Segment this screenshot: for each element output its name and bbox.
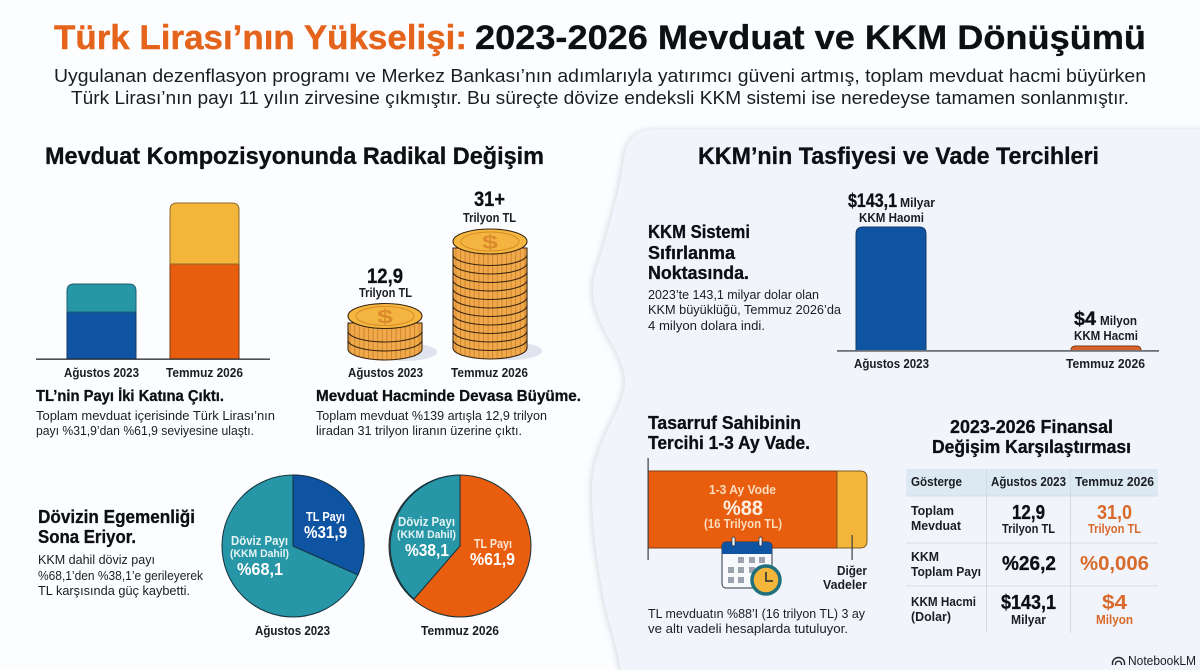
text block: maturity note: TL mevduatın %88’I (16 trilyon TL) 3 ay xyxy=(648,606,865,621)
pie chart: July 2026: TL Payı xyxy=(474,537,512,551)
maturity bar xyxy=(648,458,867,592)
subtitle: Türk Lirası’nın payı 11 yılın zirvesine çıkmıştır. Bu süreçte dövize endeksli KKM sistemi ise neredeyse tamamen sonlanmıştır. xyxy=(71,87,1129,108)
text block: maturity note: ve altı vadeli hesaplarda tutuluyor. xyxy=(648,621,848,636)
stacked bar chart: TL share: Ağustos 2023 xyxy=(64,366,139,380)
text block: KKM system xyxy=(648,222,842,333)
table header xyxy=(911,475,1154,489)
text block: FX dominance: KKM dahil döviz payı xyxy=(38,552,155,567)
row: KKM share: Toplam Payı xyxy=(911,565,981,579)
coin stack: 12,9 trillion: $ xyxy=(377,307,394,328)
icon: calendar with clock xyxy=(722,537,780,594)
pie chart: August 2023: Ağustos 2023 xyxy=(255,624,330,638)
text block: FX dominance: Dövizin Egemenliği xyxy=(38,507,195,527)
heading: maturity preference xyxy=(648,413,810,453)
text block: TL share: TL’nin Payı İki Katına Çıktı. xyxy=(36,387,224,405)
maturity bar: (16 Trilyon TL) xyxy=(704,517,782,531)
text block: KKM system: 4 milyon dolara indi. xyxy=(648,318,765,333)
text block: deposit growth: liradan 31 trilyon liranın üzerine çıktı. xyxy=(316,423,522,438)
text block: deposit growth: Toplam mevduat %139 artışla 12,9 trilyon xyxy=(316,408,547,423)
coin stack: 31+ trillion: Trilyon TL xyxy=(463,211,516,225)
row: total deposits: Mevduat xyxy=(911,519,962,533)
text block: KKM system: Noktasında. xyxy=(648,263,749,283)
heading: maturity preference: Tercihi 1-3 Ay Vade. xyxy=(648,433,810,453)
pie chart: August 2023 xyxy=(222,475,364,638)
pie chart: July 2026: %38,1 xyxy=(405,540,449,560)
maturity bar: Vadeler xyxy=(823,578,867,592)
logo: NotebookLM: NotebookLM xyxy=(1128,653,1196,668)
coin stack: 12,9 trillion: Trilyon TL xyxy=(359,286,412,300)
row: KKM share: %26,2 xyxy=(1002,553,1056,575)
bar chart: KKM volume: Milyar xyxy=(900,196,935,210)
table header: Gösterge xyxy=(911,475,962,489)
subtitle xyxy=(54,65,1146,108)
row: KKM share xyxy=(911,550,1149,579)
text block: KKM system: Sıfırlanma xyxy=(648,243,736,263)
pie chart: July 2026 xyxy=(389,475,531,638)
text block: maturity note xyxy=(648,606,865,636)
pie chart: July 2026: (KKM Dahil) xyxy=(397,529,456,541)
text block: KKM system: 2023’te 143,1 milyar dolar olan xyxy=(648,287,819,302)
bar chart: KKM volume: $4 xyxy=(1074,309,1096,330)
coin stack: 31+ trillion: Temmuz 2026 xyxy=(451,366,528,380)
stacked bar chart: TL share xyxy=(36,203,270,380)
heading: maturity preference: Tasarruf Sahibinin xyxy=(648,413,801,433)
text block: KKM system: KKM Sistemi xyxy=(648,222,750,242)
row: KKM volume: KKM Hacmi xyxy=(911,595,976,609)
coin stack: 31+ trillion xyxy=(451,188,542,380)
pie chart: July 2026: %61,9 xyxy=(470,549,515,569)
comparison table xyxy=(906,469,1158,633)
row: total deposits: Toplam xyxy=(911,504,954,518)
row: total deposits: 31,0 xyxy=(1097,502,1132,524)
pie chart: August 2023: TL Payı xyxy=(306,510,345,524)
text block: TL share: Toplam mevduat içerisinde Türk Lirası’nın xyxy=(36,408,275,423)
row: KKM volume: $4 xyxy=(1102,592,1128,614)
bar chart: KKM volume xyxy=(837,191,1159,371)
title: Türk Lirası’nın Yükselişi: xyxy=(54,19,467,57)
heading: comparison table: 2023-2026 Finansal xyxy=(950,417,1113,437)
coin stack: 12,9 trillion: 12,9 xyxy=(367,265,403,288)
row: total deposits xyxy=(911,502,1141,536)
subtitle: Uygulanan dezenflasyon programı ve Merkez Bankası’nın adımlarıyla yatırımcı güveni artmış, toplam mevduat hacmi büyürken xyxy=(54,65,1146,86)
coin stack: 31+ trillion: 31+ xyxy=(474,188,505,211)
row: KKM volume: $143,1 xyxy=(1001,592,1056,614)
maturity bar: Diğer xyxy=(837,564,867,578)
text block: FX dominance xyxy=(38,507,203,598)
row: KKM volume xyxy=(911,592,1133,627)
table header: Ağustos 2023 xyxy=(991,475,1066,489)
row: KKM share: KKM xyxy=(911,550,939,564)
maturity bar: 1-3 Ay Vode xyxy=(709,483,776,497)
row: total deposits: 12,9 xyxy=(1012,502,1045,524)
text block: FX dominance: TL karşısında güç kaybetti. xyxy=(38,583,190,598)
pie chart: August 2023: %31,9 xyxy=(304,522,347,542)
pie chart: August 2023: (KKM Dahil) xyxy=(230,548,289,560)
row: total deposits: Trilyon TL xyxy=(1002,522,1055,536)
bar chart: KKM volume: Temmuz 2026 xyxy=(1066,357,1145,371)
bar chart: KKM volume: KKM Haomi xyxy=(859,211,924,225)
heading: right section: KKM’nin Tasfiyesi ve Vade Tercihleri xyxy=(698,143,1099,170)
row: KKM volume: Milyar xyxy=(1011,613,1046,627)
text block: deposit growth: Mevduat Hacminde Devasa Büyüme. xyxy=(316,388,581,405)
heading: comparison table: Değişim Karşılaştırması xyxy=(932,437,1131,457)
row: KKM volume: (Dolar) xyxy=(911,610,951,624)
text block: TL share xyxy=(36,387,275,438)
row: KKM volume: Milyon xyxy=(1096,613,1133,627)
pie chart: August 2023: %68,1 xyxy=(237,559,283,579)
text block: deposit growth xyxy=(316,388,581,438)
coin stack: 31+ trillion: $ xyxy=(482,232,499,254)
bar chart: KKM volume: Ağustos 2023 xyxy=(854,357,929,371)
title: 2023-2026 Mevduat ve KKM Dönüşümü xyxy=(475,19,1146,57)
pie chart: August 2023: Döviz Payı xyxy=(231,534,288,548)
coin stack: 12,9 trillion: Ağustos 2023 xyxy=(348,366,423,380)
bar chart: KKM volume: Milyon xyxy=(1100,314,1137,328)
stacked bar chart: TL share: Temmuz 2026 xyxy=(166,366,243,380)
row: total deposits: Trilyon TL xyxy=(1088,522,1141,536)
table header: Temmuz 2026 xyxy=(1075,475,1154,489)
text block: KKM system: KKM büyüklüğü, Temmuz 2026’da xyxy=(648,302,842,317)
text block: FX dominance: %68,1’den %38,1’e gerileyerek xyxy=(38,568,203,583)
text block: TL share: payı %31,9’dan %61,9 seviyesine ulaştı. xyxy=(36,423,254,438)
text block: FX dominance: Sona Eriyor. xyxy=(38,527,136,547)
bar chart: KKM volume: $143,1 xyxy=(848,191,897,212)
bar chart: KKM volume: KKM Hacmi xyxy=(1074,329,1138,343)
maturity bar: %88 xyxy=(723,497,763,520)
heading: left section: Mevduat Kompozisyonunda Radikal Değişim xyxy=(45,143,544,170)
title xyxy=(54,19,1146,57)
heading: comparison table xyxy=(932,417,1131,457)
pie chart: July 2026: Temmuz 2026 xyxy=(421,624,499,638)
panel: right background xyxy=(592,129,1200,670)
pie chart: July 2026: Döviz Payı xyxy=(398,515,455,529)
coin stack: 12,9 trillion xyxy=(348,265,437,380)
row: KKM share: %0,006 xyxy=(1080,553,1149,575)
